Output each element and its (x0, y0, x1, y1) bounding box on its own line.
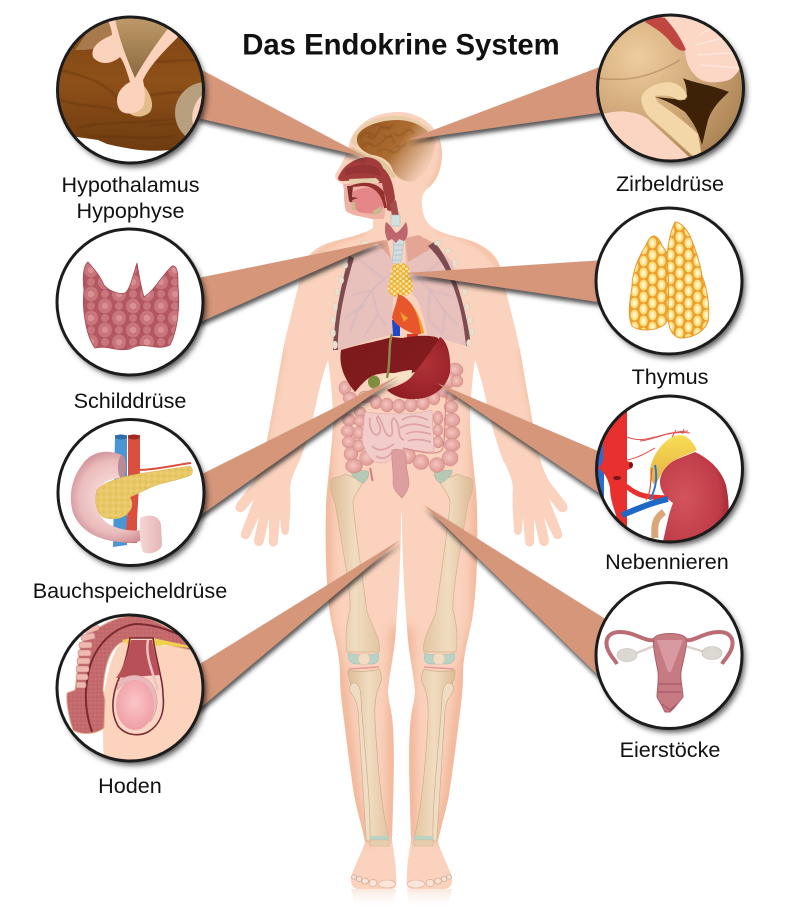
adrenal gland (650, 435, 697, 485)
label: Thymus: Thymus (632, 364, 709, 389)
posterior lobe (128, 85, 152, 117)
nasal cavity (338, 157, 395, 212)
fallopian tubes (606, 632, 732, 664)
aorta (598, 408, 627, 527)
vena cava edge (598, 442, 604, 498)
panel: Hoden (57, 615, 210, 770)
skeleton: left leg (330, 470, 389, 846)
splenic artery (138, 463, 191, 470)
pink tissue band (67, 616, 190, 734)
pink upper right (646, 16, 740, 82)
label: Hoden: Hoden (98, 773, 162, 798)
jaw cream (351, 202, 382, 216)
toes: right foot (408, 875, 451, 888)
panel: Schilddrüse (57, 229, 203, 375)
left lobe (629, 236, 671, 330)
tan wedge (115, 18, 168, 78)
cream pineal shape (641, 82, 701, 157)
beam: Nebennieren (437, 383, 605, 497)
ovaries (617, 646, 722, 662)
liver (340, 336, 439, 392)
panel: Thymus (596, 208, 742, 354)
beam: Zirbeldrüse (407, 65, 605, 140)
brown brain tissue (59, 34, 202, 151)
ureter (655, 512, 664, 538)
scrotum (113, 638, 163, 735)
palate (349, 178, 380, 184)
label: Zirbeldrüse: Zirbeldrüse (616, 171, 724, 196)
pharynx band (350, 183, 387, 208)
pink lower left (604, 111, 689, 160)
upper chest (376, 235, 437, 262)
small thyroid (385, 222, 408, 243)
circle backgrounds with shadow (57, 15, 744, 761)
tongue (352, 188, 384, 214)
testis (116, 680, 154, 730)
label: Hypophyse: Hypophyse (76, 198, 185, 223)
oral region (343, 183, 386, 219)
skull base (351, 146, 396, 178)
epididymis (117, 675, 157, 722)
skull outline (351, 116, 437, 147)
label: Hypothalamus: Hypothalamus (61, 172, 200, 197)
renal vein (622, 499, 668, 515)
vertebrae (76, 624, 100, 688)
stomach (387, 337, 450, 399)
panel: Eierstöcke (596, 582, 742, 728)
stalk and pituitary (92, 14, 178, 114)
blue vein (113, 435, 127, 547)
uterus (653, 634, 686, 712)
red structure (645, 17, 686, 51)
heart (392, 294, 424, 338)
lower right structure (175, 82, 202, 136)
foot reflections (351, 889, 452, 910)
lungs (338, 235, 466, 350)
bronchial tree (345, 258, 458, 335)
skeleton: right leg (414, 470, 473, 846)
brain (357, 120, 436, 182)
body silhouette (235, 112, 568, 889)
fat (122, 638, 190, 648)
sigmoid vessel (403, 395, 447, 453)
skin (102, 642, 202, 760)
pancreas (96, 466, 192, 519)
label: Bauchspeicheldrüse: Bauchspeicheldrüse (33, 578, 227, 603)
title: Das Endokrine System (242, 28, 560, 62)
small arteries (627, 429, 690, 460)
appendix (370, 468, 373, 481)
label: Schilddrüse: Schilddrüse (74, 388, 186, 413)
upper trachea (390, 200, 399, 216)
panel: Nebennieren (596, 396, 742, 545)
ligaments (634, 646, 705, 654)
beam: Bauchspeicheldrüse (198, 376, 398, 517)
ribs (330, 240, 475, 350)
lips (347, 186, 358, 204)
dark lining (86, 624, 190, 732)
small thymus (388, 263, 413, 297)
rectum (392, 449, 409, 498)
duodenum (71, 452, 142, 543)
beam: Thymus (405, 260, 605, 303)
gallbladder (368, 376, 380, 388)
beam: Hoden (198, 540, 400, 710)
red artery (125, 435, 140, 543)
ventricle (655, 78, 729, 145)
beam: Eierstöcke (424, 505, 607, 680)
panel: Bauchspeicheldrüse (58, 420, 204, 566)
right lobe (667, 222, 709, 338)
beam: Schilddrüse (198, 240, 385, 323)
toes: left foot (352, 875, 396, 888)
kidney (660, 452, 729, 545)
pointer beams (198, 65, 607, 710)
human body figure (235, 112, 568, 900)
duodenum end (140, 516, 162, 553)
renal artery (626, 486, 668, 498)
panel: Zirbeldrüse (596, 14, 745, 162)
label: Nebennieren: Nebennieren (605, 549, 729, 574)
pancreas sketch (380, 370, 412, 384)
bile duct (387, 334, 392, 378)
panel: Hypothalamus / Hypophyse (56, 16, 205, 164)
small intestine (362, 410, 434, 463)
large intestine (339, 363, 463, 473)
label: Eierstöcke: Eierstöcke (620, 737, 720, 762)
trachea (391, 215, 404, 268)
head interior (338, 116, 437, 219)
beam: Hypothalamus (198, 68, 366, 157)
